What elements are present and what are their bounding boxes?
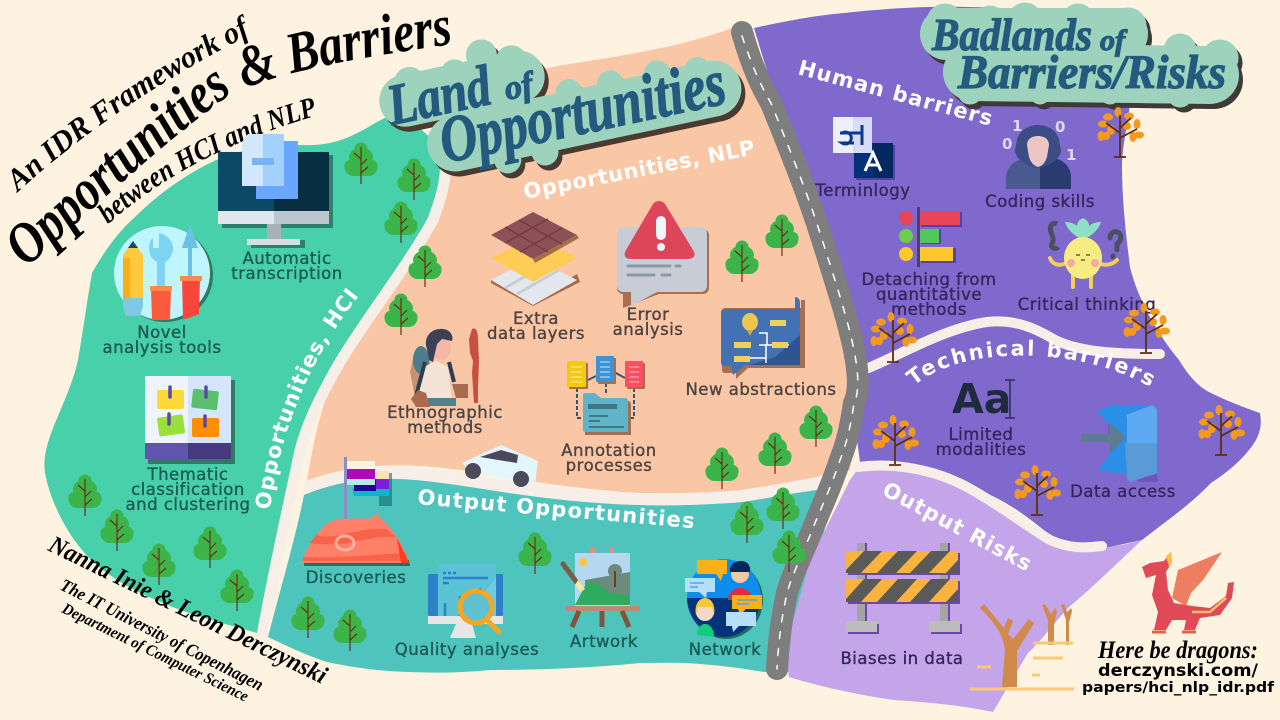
text: link line 1: derczynski.com/ (1098, 661, 1259, 681)
green tree (384, 202, 418, 243)
icon: blueprint (New abstractions) (721, 297, 805, 379)
green tree (772, 530, 806, 572)
label: Limited modalities: modalities (936, 440, 1026, 459)
green tree (142, 544, 176, 585)
section label: Output Risks: Output Risks (879, 477, 1036, 576)
panel: Opportunities HCI green land (44, 110, 447, 633)
label: Ethnographic methods: Ethnographic (387, 403, 503, 422)
path: white divider green to teal (262, 150, 446, 636)
label: Thematic classification and clustering: classification (131, 480, 245, 499)
green tree (766, 488, 800, 529)
blob: heading backdrop (389, 31, 723, 183)
icon: warning speech bubble (Error analysis) (617, 201, 709, 308)
section label: Opportunities, NLP: Opportunities, NLP (521, 136, 757, 204)
icon: hooded coder (Coding skills): 1 (1012, 117, 1022, 135)
title line 3: between HCI and NLP (96, 98, 314, 224)
green tree (765, 214, 799, 256)
label: Network: Network (689, 640, 761, 659)
path: white divider human to technical (866, 321, 1160, 369)
heading: Land of Opportunities: of (501, 65, 540, 108)
road (742, 32, 858, 669)
heading: Badlands of Barriers/Risks: Barriers/Risks (957, 46, 1226, 99)
section label: Human barriers: Human barriers (796, 56, 995, 131)
label: Thematic classification and clustering: and clustering (126, 495, 250, 514)
icon: hooded coder (Coding skills): 1 (1066, 146, 1076, 164)
panel: Opportunities NLP peach land (307, 24, 868, 494)
label: Data access: Data access (1070, 482, 1176, 501)
label: Extra data layers: data layers (487, 324, 585, 343)
text: Here be dragons: Here be dragons: (1097, 637, 1258, 664)
label: Error analysis: Error (627, 305, 669, 324)
green tree (518, 532, 552, 574)
icon: chocolate and paper layers (Extra data layers) (491, 212, 580, 306)
label: Biases in data: Biases in data (840, 649, 964, 668)
blob: heading backdrop (927, 3, 1238, 107)
label: Novel analysis tools: Novel (137, 323, 187, 342)
green tree (799, 406, 833, 447)
section label: Output Opportunities: Output Opportunities (417, 485, 696, 533)
icon: people with speech bubbles (Network) (685, 559, 763, 639)
icon: monitor with magnifier (Quality analyses) (428, 564, 503, 638)
heading: Badlands of Barriers/Risks (927, 3, 1238, 107)
label: Novel analysis tools: analysis tools (103, 338, 221, 357)
text: affiliation department: Department of Computer Science (58, 600, 251, 705)
autumn tree (1014, 465, 1061, 515)
green tree (220, 570, 254, 611)
section label: Technical barriers: Technical barriers (904, 340, 1154, 386)
icon: confused pineapple (Critical thinking) (1050, 218, 1121, 287)
icon: login arrow door (Data access) (1081, 405, 1158, 482)
autumn tree (1098, 107, 1144, 157)
icon: flag on a hill (Discoveries) (302, 457, 410, 566)
green tree (344, 142, 378, 184)
text: authors: Nanna Inie & Leon Derczynski (44, 531, 331, 690)
icon: futuristic truck (462, 445, 538, 487)
icon: hooded coder (Coding skills) (1002, 117, 1076, 189)
label: New abstractions: New abstractions (685, 380, 837, 399)
label: Error analysis: analysis (613, 320, 683, 339)
section label: Opportunities, HCI: Opportunities, HCI (256, 288, 358, 508)
heading: Badlands of Barriers/Risks: Badlands (931, 9, 1092, 60)
icon: hiker with backpack (Ethnographic methods) (410, 328, 479, 407)
icon: tools in a circle (Novel analysis tools) (114, 224, 213, 322)
title line 1: An IDR Framework of (12, 14, 248, 193)
icon: easel and painting (Artwork) (563, 547, 640, 627)
label: Discoveries: Discoveries (306, 568, 406, 587)
green tree (68, 474, 102, 516)
green tree (100, 510, 134, 551)
label: Detaching from quantitative methods: methods (891, 300, 967, 319)
autumn tree (870, 312, 917, 362)
label: Annotation processes: processes (566, 456, 652, 475)
autumn tree (1198, 405, 1245, 455)
trees (68, 107, 1245, 651)
icon: translation squares (Terminology) (833, 117, 895, 180)
green tree (384, 294, 418, 335)
icon: dead trees (970, 604, 1074, 689)
green tree (291, 596, 325, 638)
label: Critical thinking: Critical thinking (1018, 295, 1156, 314)
icon: red dragon (1142, 552, 1234, 632)
label: Terminology: Terminlogy (815, 181, 910, 200)
heading: Badlands of Barriers/Risks: of (1100, 24, 1128, 57)
green tree (758, 432, 792, 474)
icon: monitor with document (Automatic transcription) (218, 134, 333, 248)
icon: bar chart (Detaching from quantitative methods) (899, 207, 962, 267)
green tree (193, 526, 227, 568)
green tree (408, 246, 442, 287)
heading: Land of Opportunities (380, 31, 732, 183)
label: Artwork: Artwork (570, 632, 638, 651)
label: Extra data layers: Extra (513, 309, 559, 328)
text: affiliation university: The IT University of Copenhagen (57, 575, 267, 695)
path: white divider peach to teal (304, 473, 835, 499)
label: Automatic transcription: transcription (231, 264, 343, 283)
label: Detaching from quantitative methods: quantitative (876, 285, 982, 304)
label: Limited modalities: Limited (948, 425, 1014, 444)
title: An IDR Framework of Opportunities and Barriers between HCI and NLP (10, 14, 450, 262)
text: link line 2: papers/hci_nlp_idr.pdf (1082, 680, 1275, 696)
panel: Output Risks lavender land (785, 466, 1142, 712)
icon: hooded coder (Coding skills): 0 (1002, 135, 1012, 153)
green tree (705, 448, 739, 489)
label: Quality analyses: Quality analyses (395, 640, 539, 659)
autumn tree (1124, 303, 1170, 353)
green tree (730, 502, 764, 543)
label: Coding skills: Coding skills (985, 192, 1095, 211)
icon: linked annotation cards (Annotation processes) (567, 356, 645, 435)
icon: board with sticky notes (Thematic classification) (145, 376, 235, 464)
panel: Human and Technical barriers purple land (754, 7, 1261, 549)
green tree (397, 158, 431, 200)
path: white divider technical to risks (858, 466, 1102, 547)
green tree (333, 610, 367, 651)
label: Thematic classification and clustering: Thematic (146, 465, 228, 484)
heading: Land of Opportunities: Land (380, 52, 497, 138)
icon: hooded coder (Coding skills): 0 (1055, 118, 1065, 136)
label: Annotation processes: Annotation (561, 441, 657, 460)
label: Detaching from quantitative methods: Detaching from (861, 270, 997, 289)
icon: road barrier (Biases in data) (846, 543, 962, 634)
heading: Land of Opportunities: Opportunities (433, 46, 732, 178)
label: Automatic transcription: Automatic (242, 249, 332, 268)
autumn tree (872, 415, 919, 465)
panel: Output Opportunities teal land (268, 479, 835, 673)
label: Ethnographic methods: methods (407, 418, 483, 437)
green tree (725, 240, 759, 282)
icon: font size glyph (Limited modalities): Aa (952, 375, 1011, 423)
